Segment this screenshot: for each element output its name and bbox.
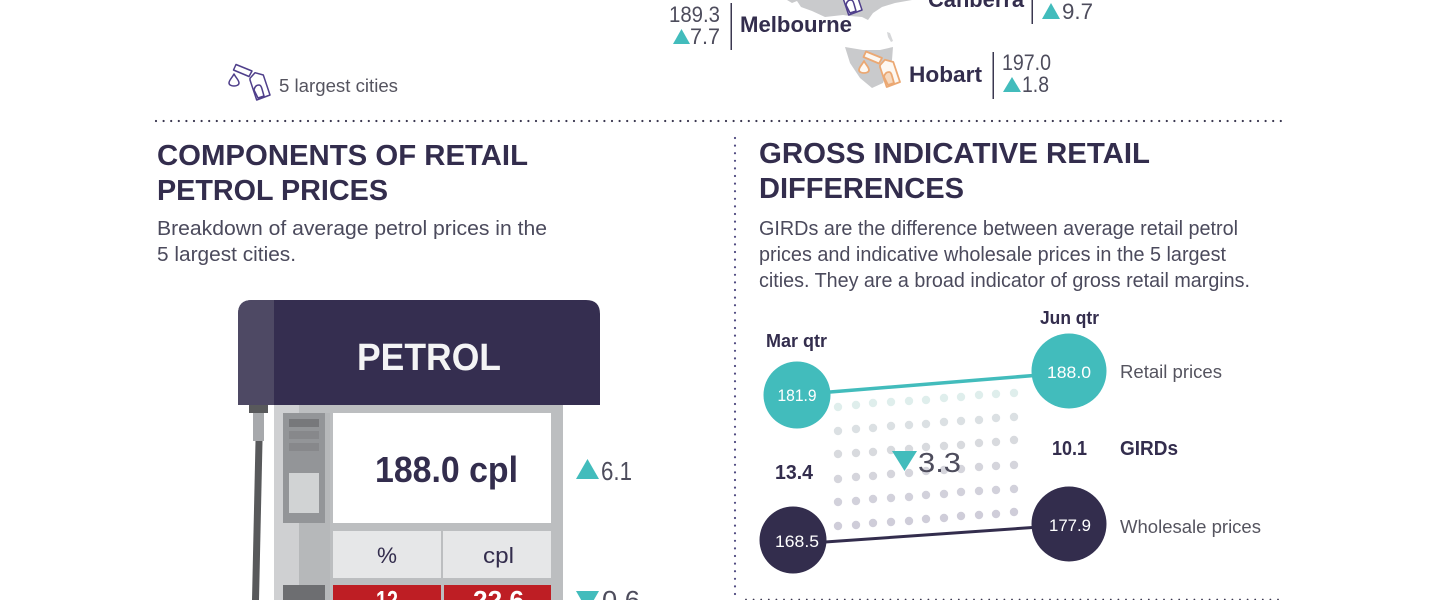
map: Victoria and Tasmania	[787, 0, 912, 88]
GIRD chart	[760, 308, 1261, 574]
label: wholesale prices: Wholesale prices	[1120, 517, 1261, 537]
label: Melbourne	[669, 2, 852, 50]
text: components description: 5 largest cities.	[157, 244, 296, 266]
dot matrix	[834, 389, 1018, 530]
label: Melbourne: Melbourne	[740, 12, 852, 37]
change: GIRD down 3.3	[892, 447, 961, 478]
heading: components of retail petrol prices	[157, 140, 528, 207]
June retail point: 188.0	[1047, 363, 1091, 382]
March retail point: 181.9	[778, 386, 816, 405]
text: components description	[157, 218, 547, 266]
table header: %	[377, 543, 397, 568]
text: GIRDs description: GIRDs are the difference between average retail petrol	[759, 218, 1238, 240]
text: GIRDs description: prices and indicative wholesale prices in the 5 largest	[759, 244, 1226, 266]
value: March GIRD: 13.4	[775, 462, 814, 484]
March wholesale point	[760, 506, 826, 574]
heading: components of retail petrol prices: COMPONENTS OF RETAIL	[157, 140, 528, 172]
retail line	[830, 375, 1040, 392]
icon: Hobart fuel nozzle	[859, 52, 900, 87]
label: Melbourne: 189.3	[669, 2, 720, 27]
label: Hobart: 197.0	[1002, 50, 1051, 75]
heading: gross indicative retail differences: GROSS INDICATIVE RETAIL	[759, 138, 1150, 170]
text: components description: Breakdown of average petrol prices in the	[157, 218, 547, 240]
label: Canberra	[928, 0, 1093, 24]
label: Hobart: 1.8	[1022, 72, 1049, 97]
table header	[333, 531, 551, 578]
March retail point	[764, 362, 830, 428]
label: GIRDs: GIRDs	[1120, 438, 1178, 460]
icon: Melbourne fuel nozzle	[842, 0, 862, 15]
price display	[333, 413, 551, 523]
value: June GIRD: 10.1	[1052, 438, 1087, 460]
fuel hose	[249, 405, 268, 600]
pump hood: PETROL	[357, 337, 501, 379]
label: retail prices: Retail prices	[1120, 362, 1222, 382]
text: GIRDs description: cities. They are a broad indicator of gross retail margins.	[759, 270, 1250, 292]
text: GIRDs description	[759, 218, 1250, 292]
change: total price up 6.1: 6.1	[601, 456, 632, 486]
table row: taxes	[333, 585, 551, 600]
legend: 5 largest cities: 5 largest cities	[279, 76, 398, 96]
heading: components of retail petrol prices: PETROL PRICES	[157, 175, 388, 207]
table header: cpl	[483, 543, 514, 568]
label: Hobart: Hobart	[909, 62, 983, 87]
label: Hobart	[909, 50, 1051, 99]
March wholesale point: 168.5	[775, 532, 819, 551]
wholesale line	[825, 527, 1040, 542]
column label: Jun qtr: Jun qtr	[1040, 308, 1099, 328]
heading: gross indicative retail differences	[759, 138, 1150, 205]
June wholesale point: 177.9	[1049, 516, 1091, 535]
pump hood	[238, 300, 600, 405]
June retail point	[1032, 334, 1106, 408]
legend: 5 largest cities	[229, 64, 398, 100]
change: down 0.6	[576, 585, 640, 600]
pump body	[274, 405, 563, 600]
heading: gross indicative retail differences: DIFFERENCES	[759, 173, 964, 205]
change: total price up 6.1	[576, 456, 632, 486]
change: GIRD down 3.3: 3.3	[918, 447, 961, 478]
side panel	[283, 413, 325, 600]
June wholesale point	[1032, 486, 1106, 562]
label: Melbourne: 7.7	[690, 24, 720, 49]
petrol pump	[238, 300, 600, 600]
price display: 188.0 cpl	[375, 449, 518, 490]
column label: Mar qtr: Mar qtr	[766, 331, 827, 351]
